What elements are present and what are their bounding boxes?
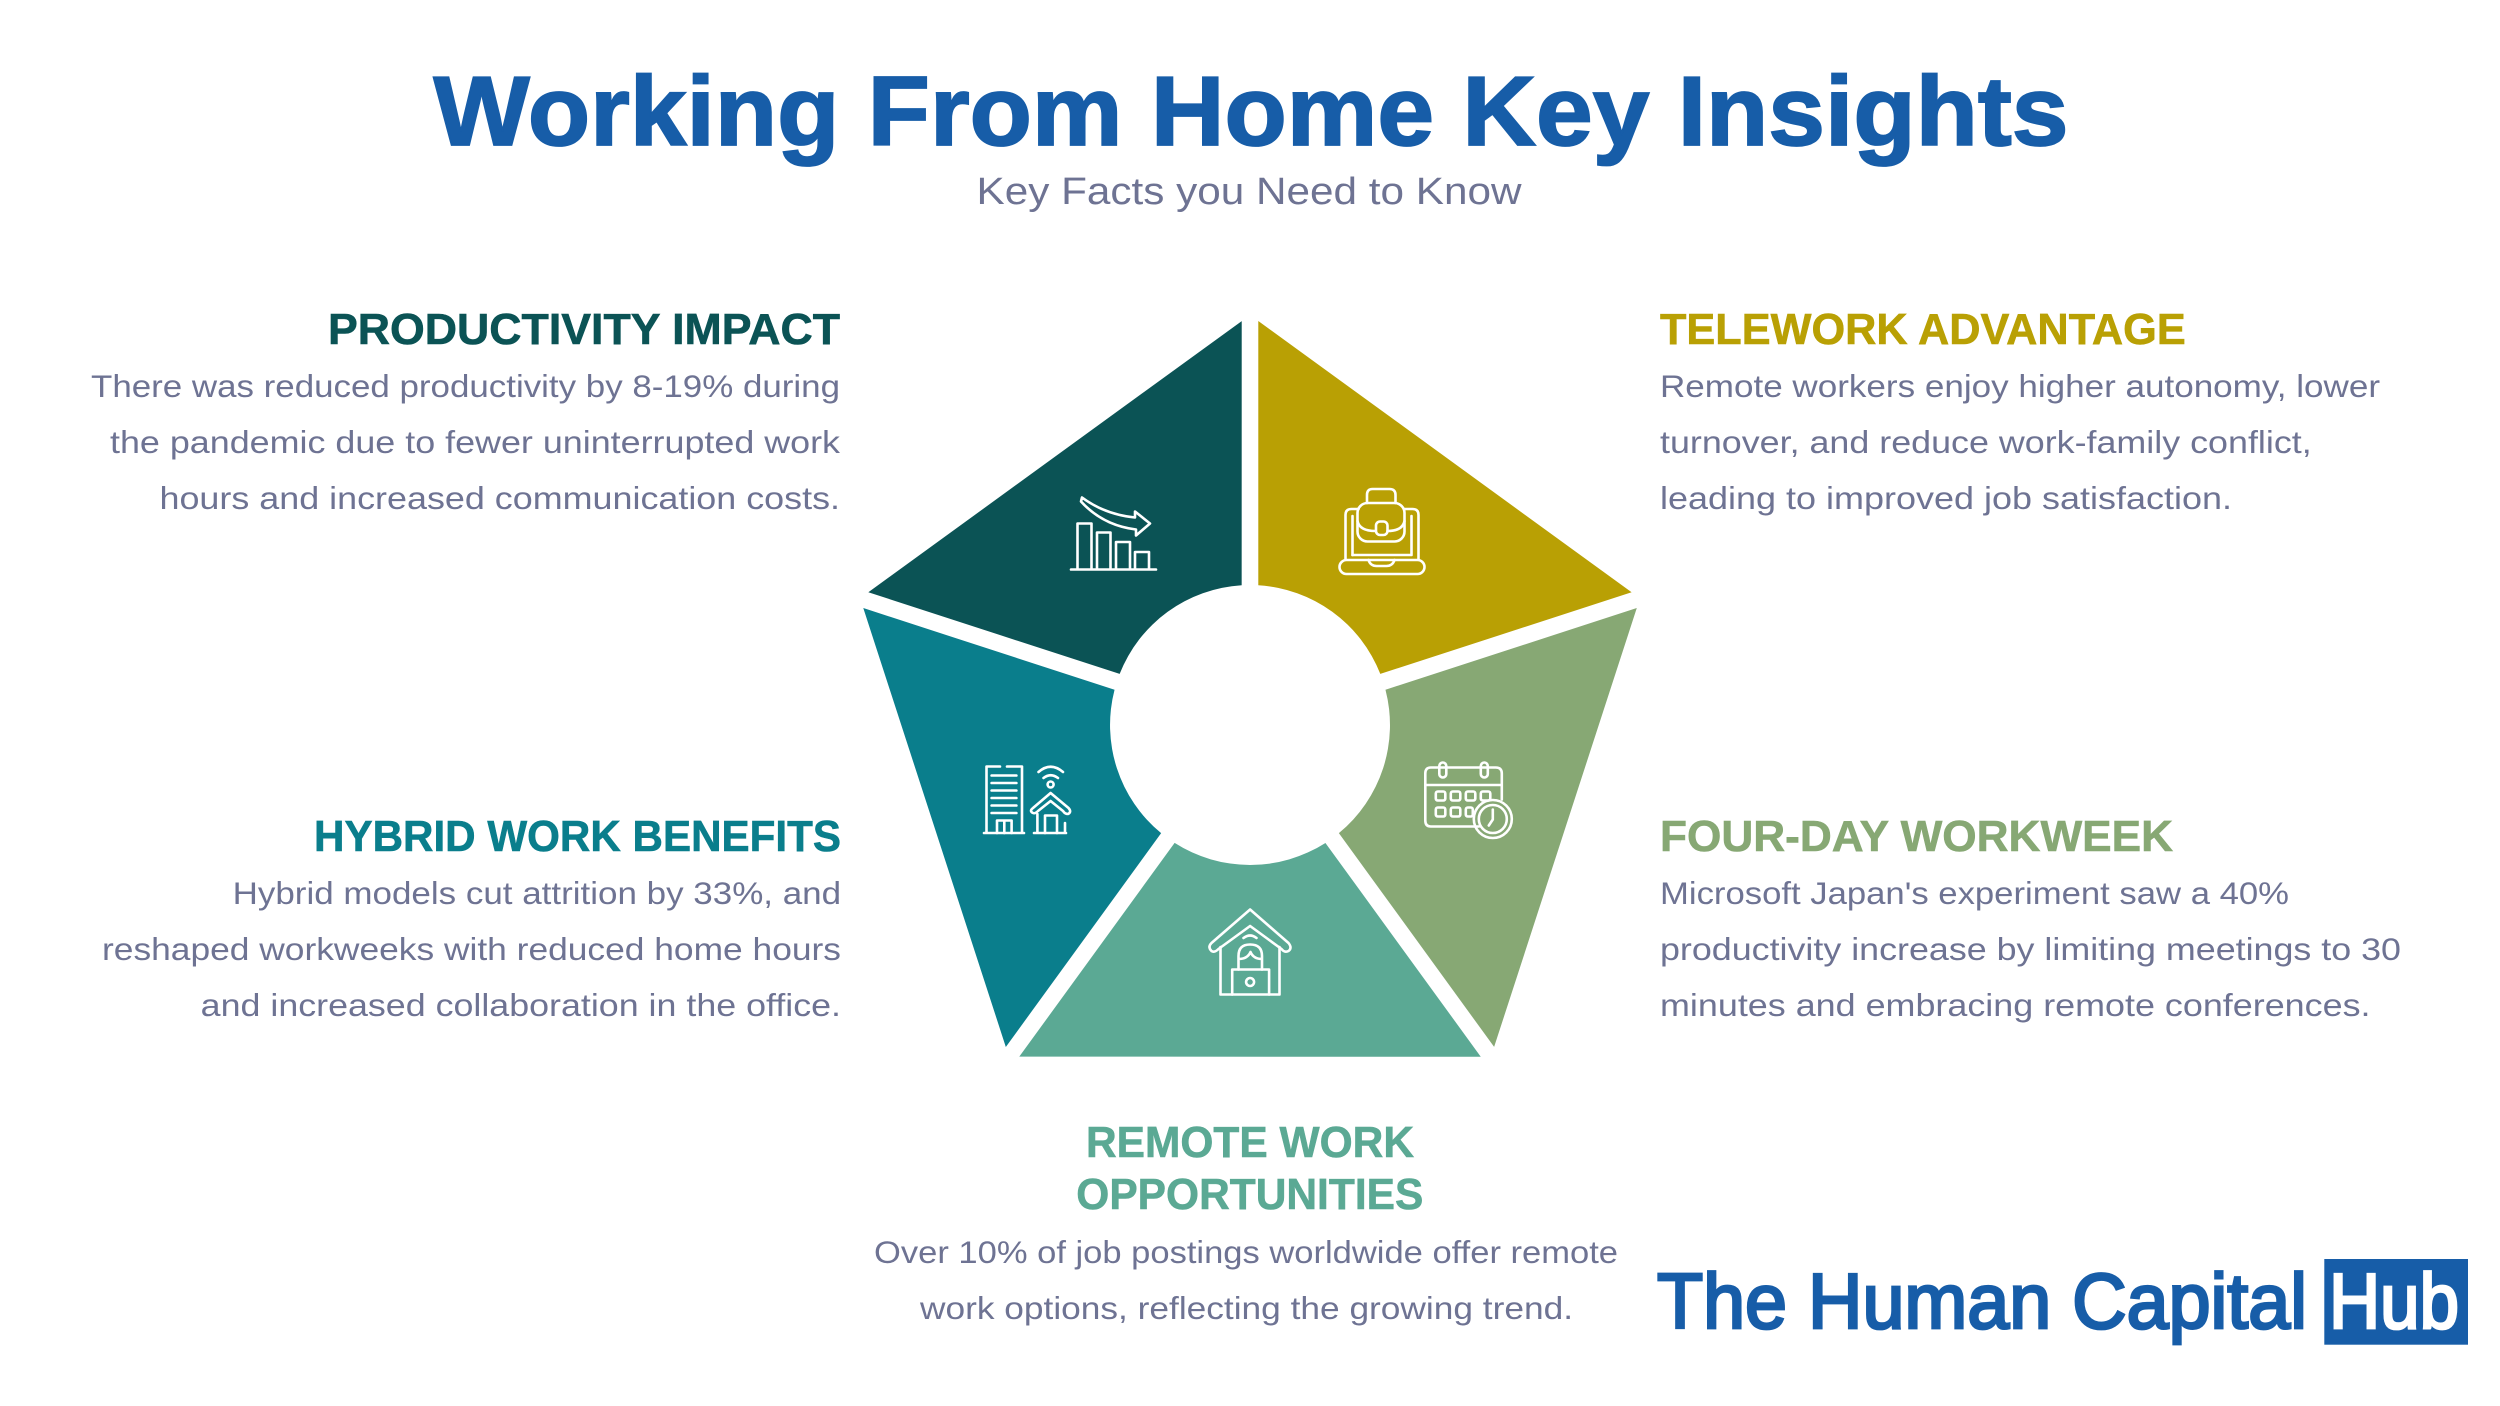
body: reshaped workweeks with reduced home hours [102, 931, 841, 967]
body: Remote workers enjoy higher autonomy, lower [1660, 368, 2380, 404]
body: minutes and embracing remote conferences. [1660, 987, 2370, 1023]
heading: REMOTE WORK [1086, 1118, 1414, 1167]
segment: productivity impact [868, 237, 1319, 701]
body: There was reduced productivity by 8-19% during [91, 368, 840, 404]
heading: HYBRID WORK BENEFITS [314, 812, 841, 861]
pentagon diagram [704, 237, 1752, 1276]
text block: productivity impact [91, 305, 840, 516]
body: productivity increase by limiting meetings to 30 [1660, 931, 2401, 967]
heading: OPPORTUNITIES [1076, 1170, 1423, 1219]
body: Hybrid models cut attrition by 33%, and [233, 875, 841, 911]
body: and increased collaboration in the office. [201, 987, 841, 1023]
body [91, 368, 840, 516]
segment: four-day workweek [1301, 608, 1752, 1072]
heading: FOUR-DAY WORKWEEK [1660, 812, 2173, 861]
icon: office building and connected house [984, 766, 1070, 833]
text block: remote work opportunities [874, 1118, 1618, 1326]
icon: calendar with clock [1425, 762, 1512, 838]
body: hours and increased communication costs. [160, 480, 840, 516]
heading: TELEWORK ADVANTAGE [1660, 305, 2186, 354]
icon: declining bar chart [1071, 498, 1156, 570]
body: Microsoft Japan's experiment saw a 40% [1660, 875, 2289, 911]
heading: PRODUCTIVITY IMPACT [328, 305, 840, 354]
body [1660, 368, 2380, 516]
body [102, 875, 841, 1023]
body: the pandemic due to fewer uninterrupted work [110, 424, 840, 460]
body [1660, 875, 2401, 1023]
body: Over 10% of job postings worldwide offer remote [874, 1234, 1618, 1270]
segment: hybrid work benefits [704, 542, 1213, 1047]
heading [1076, 1118, 1423, 1219]
body: turnover, and reduce work-family conflict, [1660, 424, 2312, 460]
subtitle: Key Facts you Need to Know [976, 171, 1522, 213]
body [874, 1234, 1618, 1326]
text block: telework advantage [1660, 305, 2380, 516]
logo: The Human Capital Hub: The Human Capital [1657, 1257, 2307, 1345]
title: Working From Home Key Insights [434, 56, 2068, 166]
text block: four-day workweek [1660, 812, 2401, 1023]
segment: remote work opportunities [971, 771, 1481, 1276]
text block: hybrid work benefits [102, 812, 841, 1023]
icon: laptop and briefcase [1340, 489, 1424, 574]
icon: person working at home [1210, 910, 1290, 994]
segment: telework advantage [1258, 321, 1632, 674]
body: leading to improved job satisfaction. [1660, 480, 2232, 516]
logo: The Human Capital Hub: Hub [2329, 1257, 2459, 1345]
body: work options, reflecting the growing trend. [919, 1290, 1573, 1326]
